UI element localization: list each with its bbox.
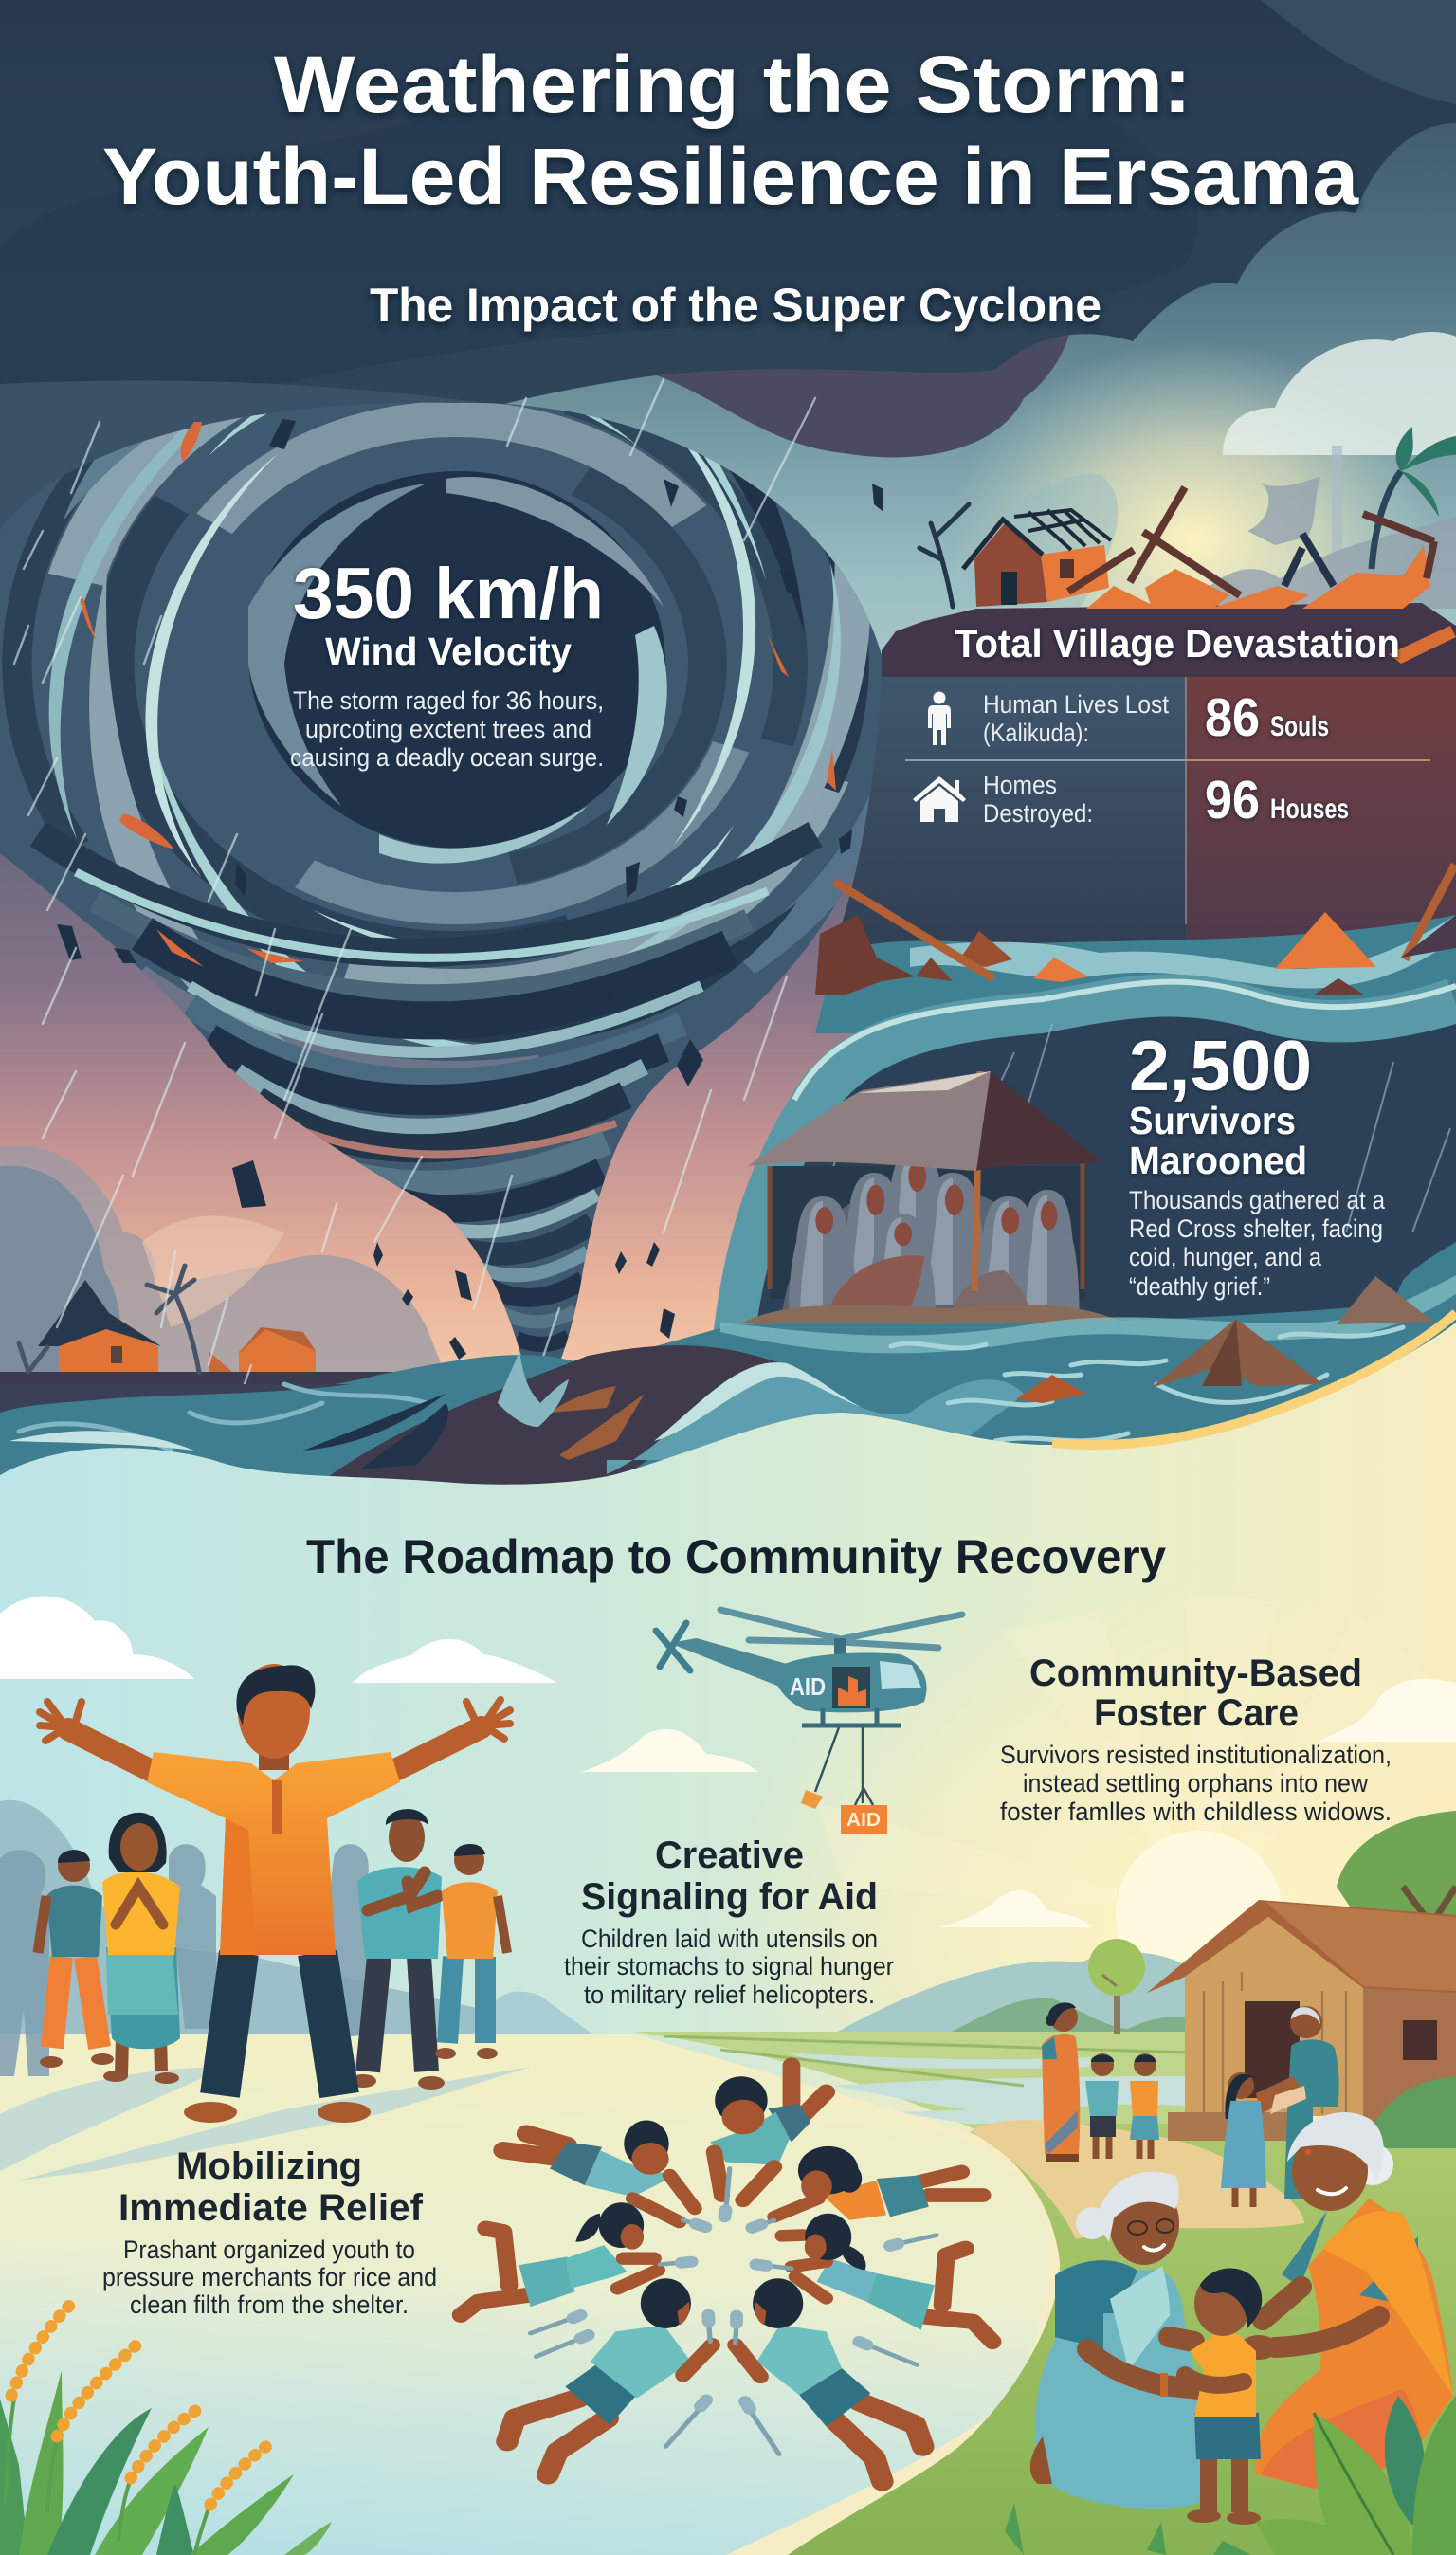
- child: lower left: [507, 2278, 712, 2474]
- girl in yellow: [102, 1813, 180, 2084]
- label: human lives lost: Human Lives Lost: [983, 690, 1169, 719]
- foster carers and child: [1030, 2112, 1453, 2525]
- stat: 96 houses: Houses: [1270, 794, 1349, 825]
- dead tree: [919, 504, 969, 607]
- tree: bent palm: [19, 1266, 199, 1372]
- text block: creative signaling: Children laid with utensils on: [581, 1925, 878, 1953]
- stat block: survivors marooned: Red Cross shelter, facing: [1129, 1214, 1383, 1243]
- stat: 96 houses: 96: [1205, 770, 1260, 830]
- debris: [57, 419, 883, 1367]
- text block: creative signaling: Creative: [655, 1834, 804, 1876]
- hut walls: [1185, 1917, 1363, 2116]
- flooded water with wreckage: [815, 865, 1456, 1033]
- heading: total village devastation: Total Village Devastation: [955, 621, 1400, 666]
- shelter scene: [739, 982, 1456, 1346]
- foreground leaves: [1005, 2396, 1456, 2555]
- stat block: wind velocity: uprcoting exctent trees and: [305, 715, 592, 743]
- label: homes destroyed: Destroyed:: [983, 799, 1093, 828]
- background: calm recovery landscape: [0, 1313, 1456, 2555]
- utensils: [531, 2168, 937, 2455]
- ropes: [815, 1727, 863, 1803]
- leaders and youth group: [0, 1664, 510, 2123]
- panel: total village devastation: [834, 677, 1456, 946]
- stat block: wind velocity: Wind Velocity: [325, 630, 572, 673]
- woman in orange sari: [1240, 2112, 1453, 2489]
- hands: [40, 1700, 510, 1741]
- text block: foster care: Foster Care: [1094, 1692, 1299, 1734]
- background: stormy sky: [0, 0, 1456, 948]
- helicopter: AID: [790, 1672, 826, 1701]
- child: upper left: [503, 2121, 695, 2222]
- head: [1287, 2112, 1393, 2211]
- child: top: [710, 2066, 827, 2200]
- helicopter: [656, 1610, 962, 1834]
- road outer cream edge: [0, 2034, 1060, 2555]
- label: homes destroyed: [983, 771, 1093, 828]
- section heading: roadmap: The Roadmap to Community Recovery: [306, 1530, 1166, 1583]
- distant grey clouds: [0, 1145, 446, 1375]
- backdrop: pink dusk sky behind funnel: [0, 758, 948, 1441]
- flood band around shelter: [739, 1002, 1456, 1346]
- text block: main title: Youth-Led Resilience in Ersama: [102, 132, 1359, 221]
- child: lower right: [736, 2278, 923, 2481]
- spiral bands: [2, 402, 870, 1069]
- panel left column: [834, 677, 1186, 946]
- road surface: [0, 2034, 1047, 2555]
- stat block: survivors marooned: Thousands gathered at a: [1129, 1186, 1386, 1214]
- text block: mobilizing relief: [102, 2145, 437, 2319]
- central leader Prashant: [40, 1664, 510, 2123]
- text block: foster care: [1000, 1652, 1392, 1826]
- text block: mobilizing relief: pressure merchants for rice and: [102, 2263, 437, 2291]
- rain streaks: [14, 379, 1450, 1432]
- icon: person: [928, 692, 951, 745]
- lower water: [0, 1275, 1456, 1517]
- text block: foster care: foster famlles with childless widows.: [1000, 1798, 1392, 1826]
- grasses and wheat: [0, 2303, 332, 2555]
- stat block: wind velocity: 350 km/h: [293, 554, 604, 634]
- stat block: survivors marooned: coid, hunger, and a: [1129, 1243, 1322, 1271]
- tornado: [0, 402, 883, 1360]
- boy on right: [435, 1844, 507, 2059]
- text block: foster care: instead settling orphans into new: [1023, 1769, 1368, 1798]
- rubble: [815, 915, 915, 995]
- boy on left: [38, 1850, 114, 2068]
- stat block: wind velocity: causing a deadly ocean surge.: [290, 743, 604, 772]
- text block: mobilizing relief: Mobilizing: [176, 2145, 362, 2187]
- light wave ribbons: [19, 1327, 1403, 1451]
- girl: [1221, 2072, 1266, 2207]
- dark land sweep: [313, 1345, 787, 1488]
- children lying on the ground: [461, 2066, 992, 2481]
- palm tree: [1372, 427, 1456, 569]
- stat block: wind velocity: The storm raged for 36 hours,: [293, 686, 604, 715]
- grandmother in blue sari: [1030, 2172, 1218, 2509]
- head: [1076, 2172, 1179, 2265]
- far wreckage and flag: [1185, 477, 1456, 609]
- elder at door: [1256, 2006, 1339, 2199]
- stat: 86 souls: Souls: [1270, 711, 1329, 742]
- grass field: [788, 2124, 1456, 2555]
- neck and head: [259, 1740, 289, 1770]
- eye of the storm: [248, 471, 667, 864]
- stat block: survivors marooned: [1129, 1026, 1386, 1301]
- label: human lives lost: [983, 690, 1169, 747]
- text block: mobilizing relief: Immediate Relief: [118, 2187, 424, 2229]
- falling crates: [801, 1790, 823, 1809]
- rice paddies: [633, 2032, 1196, 2144]
- legs: [220, 1953, 339, 2095]
- hut door: [1245, 2001, 1300, 2098]
- hill: [882, 603, 1456, 677]
- road and ground: [0, 2034, 1060, 2555]
- panel right column: [1186, 677, 1456, 946]
- blue shadows under group: [0, 2067, 531, 2181]
- wheat heads: [11, 2303, 272, 2505]
- stat block: wind velocity: [290, 554, 604, 772]
- tree at hut: [1337, 1811, 1456, 1944]
- bush: [1366, 2076, 1456, 2148]
- stat block: survivors marooned: Survivors: [1129, 1099, 1296, 1142]
- storm clouds: [0, 0, 1456, 683]
- tail: [669, 1638, 787, 1688]
- icon: house: [913, 776, 966, 822]
- boy teal: [1085, 2053, 1119, 2159]
- text block: creative signaling: [564, 1834, 894, 2009]
- grandmother arms: [1087, 2337, 1218, 2391]
- text block: creative signaling: to military relief helicopters.: [584, 1980, 875, 2009]
- shelter: [743, 1071, 1128, 1332]
- stat block: survivors marooned: Marooned: [1129, 1139, 1307, 1182]
- hills on right: [834, 1952, 1194, 2034]
- crescent highlights: [49, 413, 870, 1047]
- distant village on the left: [0, 1266, 436, 1394]
- small tree: [1088, 1939, 1145, 2034]
- tarp roof: [748, 1071, 991, 1171]
- hills on left: [0, 1800, 592, 2034]
- section heading: impact: The Impact of the Super Cyclone: [370, 279, 1101, 332]
- rain in shelter: [825, 1024, 1450, 1232]
- boy orange: [1130, 2053, 1159, 2159]
- text block: main title: Weathering the Storm:: [274, 40, 1192, 129]
- hair: [236, 1665, 315, 1725]
- child: [1185, 2269, 1262, 2525]
- text block: foster care: Community-Based: [1029, 1652, 1362, 1694]
- arms: [68, 1727, 482, 1771]
- stat: 96 houses: [1205, 770, 1349, 830]
- splash at funnel base: [498, 1351, 569, 1427]
- background family: [1042, 2002, 1339, 2207]
- skid: [802, 1708, 901, 1725]
- beams: [834, 865, 1455, 978]
- ruined village scene: [882, 427, 1456, 677]
- funnel bands: [38, 834, 815, 1372]
- text block: main title: [102, 40, 1359, 221]
- shirt: [147, 1752, 400, 1955]
- house: damaged left: [38, 1280, 161, 1372]
- woman in orange sari: [1042, 2002, 1080, 2162]
- child: upper right: [774, 2146, 983, 2220]
- hut roof: [1147, 1900, 1456, 1993]
- collapsed beams and rubble: [1068, 487, 1456, 664]
- hut: [1147, 1900, 1456, 2148]
- hut window: [1403, 2020, 1437, 2060]
- child: right girl: [782, 2214, 992, 2342]
- sandy yard: [971, 2120, 1304, 2239]
- label: homes destroyed: Homes: [983, 771, 1057, 799]
- text block: mobilizing relief: clean filth from the shelter.: [130, 2290, 409, 2319]
- child: left girl: [461, 2202, 658, 2315]
- tornado body: [0, 403, 892, 1413]
- helicopter: AID: [846, 1810, 881, 1831]
- hooded survivors: [782, 1149, 1080, 1323]
- background silhouettes: [0, 1844, 377, 2076]
- text block: foster care: Survivors resisted institutionalization,: [1000, 1741, 1392, 1769]
- label: human lives lost: (Kalikuda):: [983, 719, 1089, 747]
- sun rays: [815, 1593, 1431, 1914]
- sand base: [743, 1305, 1128, 1332]
- woman arms: [1263, 2287, 1379, 2347]
- fuselage: [773, 1653, 927, 1712]
- stat block: survivors marooned: 2,500: [1129, 1026, 1312, 1105]
- stat: 86 souls: 86: [1205, 687, 1260, 748]
- sun: [1116, 1831, 1283, 1998]
- feet: [184, 2102, 237, 2123]
- text block: creative signaling: Signaling for Aid: [581, 1876, 878, 1918]
- stat: 86 souls: [1205, 687, 1329, 748]
- sunken tents and debris: [1151, 1319, 1323, 1388]
- house: small right: [209, 1327, 316, 1372]
- broken house: [963, 510, 1111, 607]
- stat block: survivors marooned: “deathly grief.”: [1129, 1272, 1270, 1301]
- clouds: [0, 1597, 1456, 1927]
- rotor: [720, 1610, 962, 1648]
- shelter dark background: [754, 1016, 1456, 1346]
- text block: mobilizing relief: Prashant organized youth to: [123, 2236, 415, 2264]
- man on right: [350, 1809, 445, 2090]
- wheat stems: [5, 2399, 210, 2555]
- text block: creative signaling: their stomachs to signal hunger: [564, 1952, 894, 1980]
